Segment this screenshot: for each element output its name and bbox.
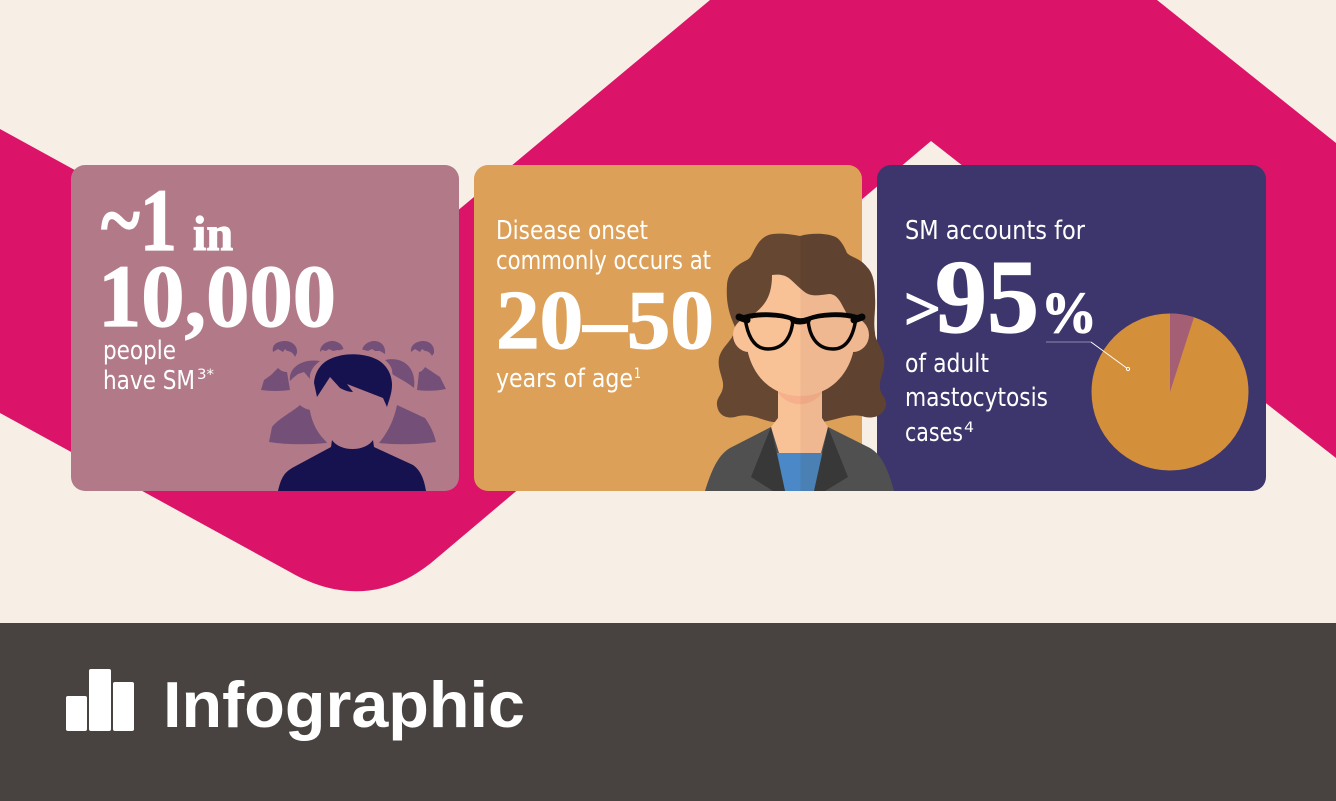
icon: bar chart: [66, 669, 134, 731]
icon: woman with glasses: [705, 234, 894, 491]
text: of adult mastocytosis cases: cases: [905, 418, 963, 448]
hair: [717, 234, 886, 422]
text: of adult mastocytosis cases: mastocytosis: [905, 383, 1048, 413]
glasses: [739, 315, 862, 349]
panel: SM share: [877, 165, 1266, 491]
heading: 20–50: 20–50: [496, 274, 714, 367]
shirt: [777, 453, 823, 491]
pie chart: 95 percent: [1092, 314, 1248, 470]
middle row people: [269, 359, 436, 444]
heading: about 1 in 10,000: 10,000: [98, 248, 336, 346]
text: of adult mastocytosis cases: of adult: [905, 349, 989, 379]
face: [733, 275, 869, 396]
back row people: [261, 341, 446, 391]
background pink chevron: [0, 0, 1336, 591]
heading: greater than 95 percent: 95: [935, 238, 1039, 355]
text: SM accounts for: SM accounts for: [905, 216, 1085, 246]
heading: greater than 95 percent: [904, 238, 1097, 355]
text: years of age: 1: [634, 366, 641, 382]
text: people have SM: have SM: [103, 366, 195, 396]
text: of adult mastocytosis cases: [905, 349, 1048, 448]
text: disease onset commonly occurs at: [496, 216, 711, 276]
heading: about 1 in 10,000: in: [193, 206, 233, 261]
panel: prevalence: [71, 165, 459, 491]
text: people have SM: people: [103, 336, 176, 366]
text: years of age: years of age: [496, 364, 633, 394]
text: of adult mastocytosis cases: 4: [964, 420, 974, 436]
text: disease onset commonly occurs at: commonly occurs at: [496, 246, 711, 276]
pie leader line: [1046, 342, 1130, 371]
text: disease onset commonly occurs at: Disease onset: [496, 216, 648, 246]
heading: about 1 in 10,000: ~1: [101, 172, 177, 270]
icon: crowd of people: [261, 341, 446, 491]
heading: greater than 95 percent: >: [904, 276, 941, 342]
text: people have SM: [103, 336, 214, 396]
footer bar: [0, 623, 1336, 801]
panel: age of onset: [474, 165, 862, 491]
main person: [278, 348, 426, 491]
neck: [771, 385, 828, 453]
heading: greater than 95 percent: %: [1041, 280, 1097, 345]
text: people have SM: 3*: [197, 367, 214, 383]
jacket: [705, 427, 894, 491]
lapels: [751, 427, 848, 491]
heading: about 1 in 10,000: [98, 172, 336, 346]
footer title: Infographic: [163, 668, 525, 741]
